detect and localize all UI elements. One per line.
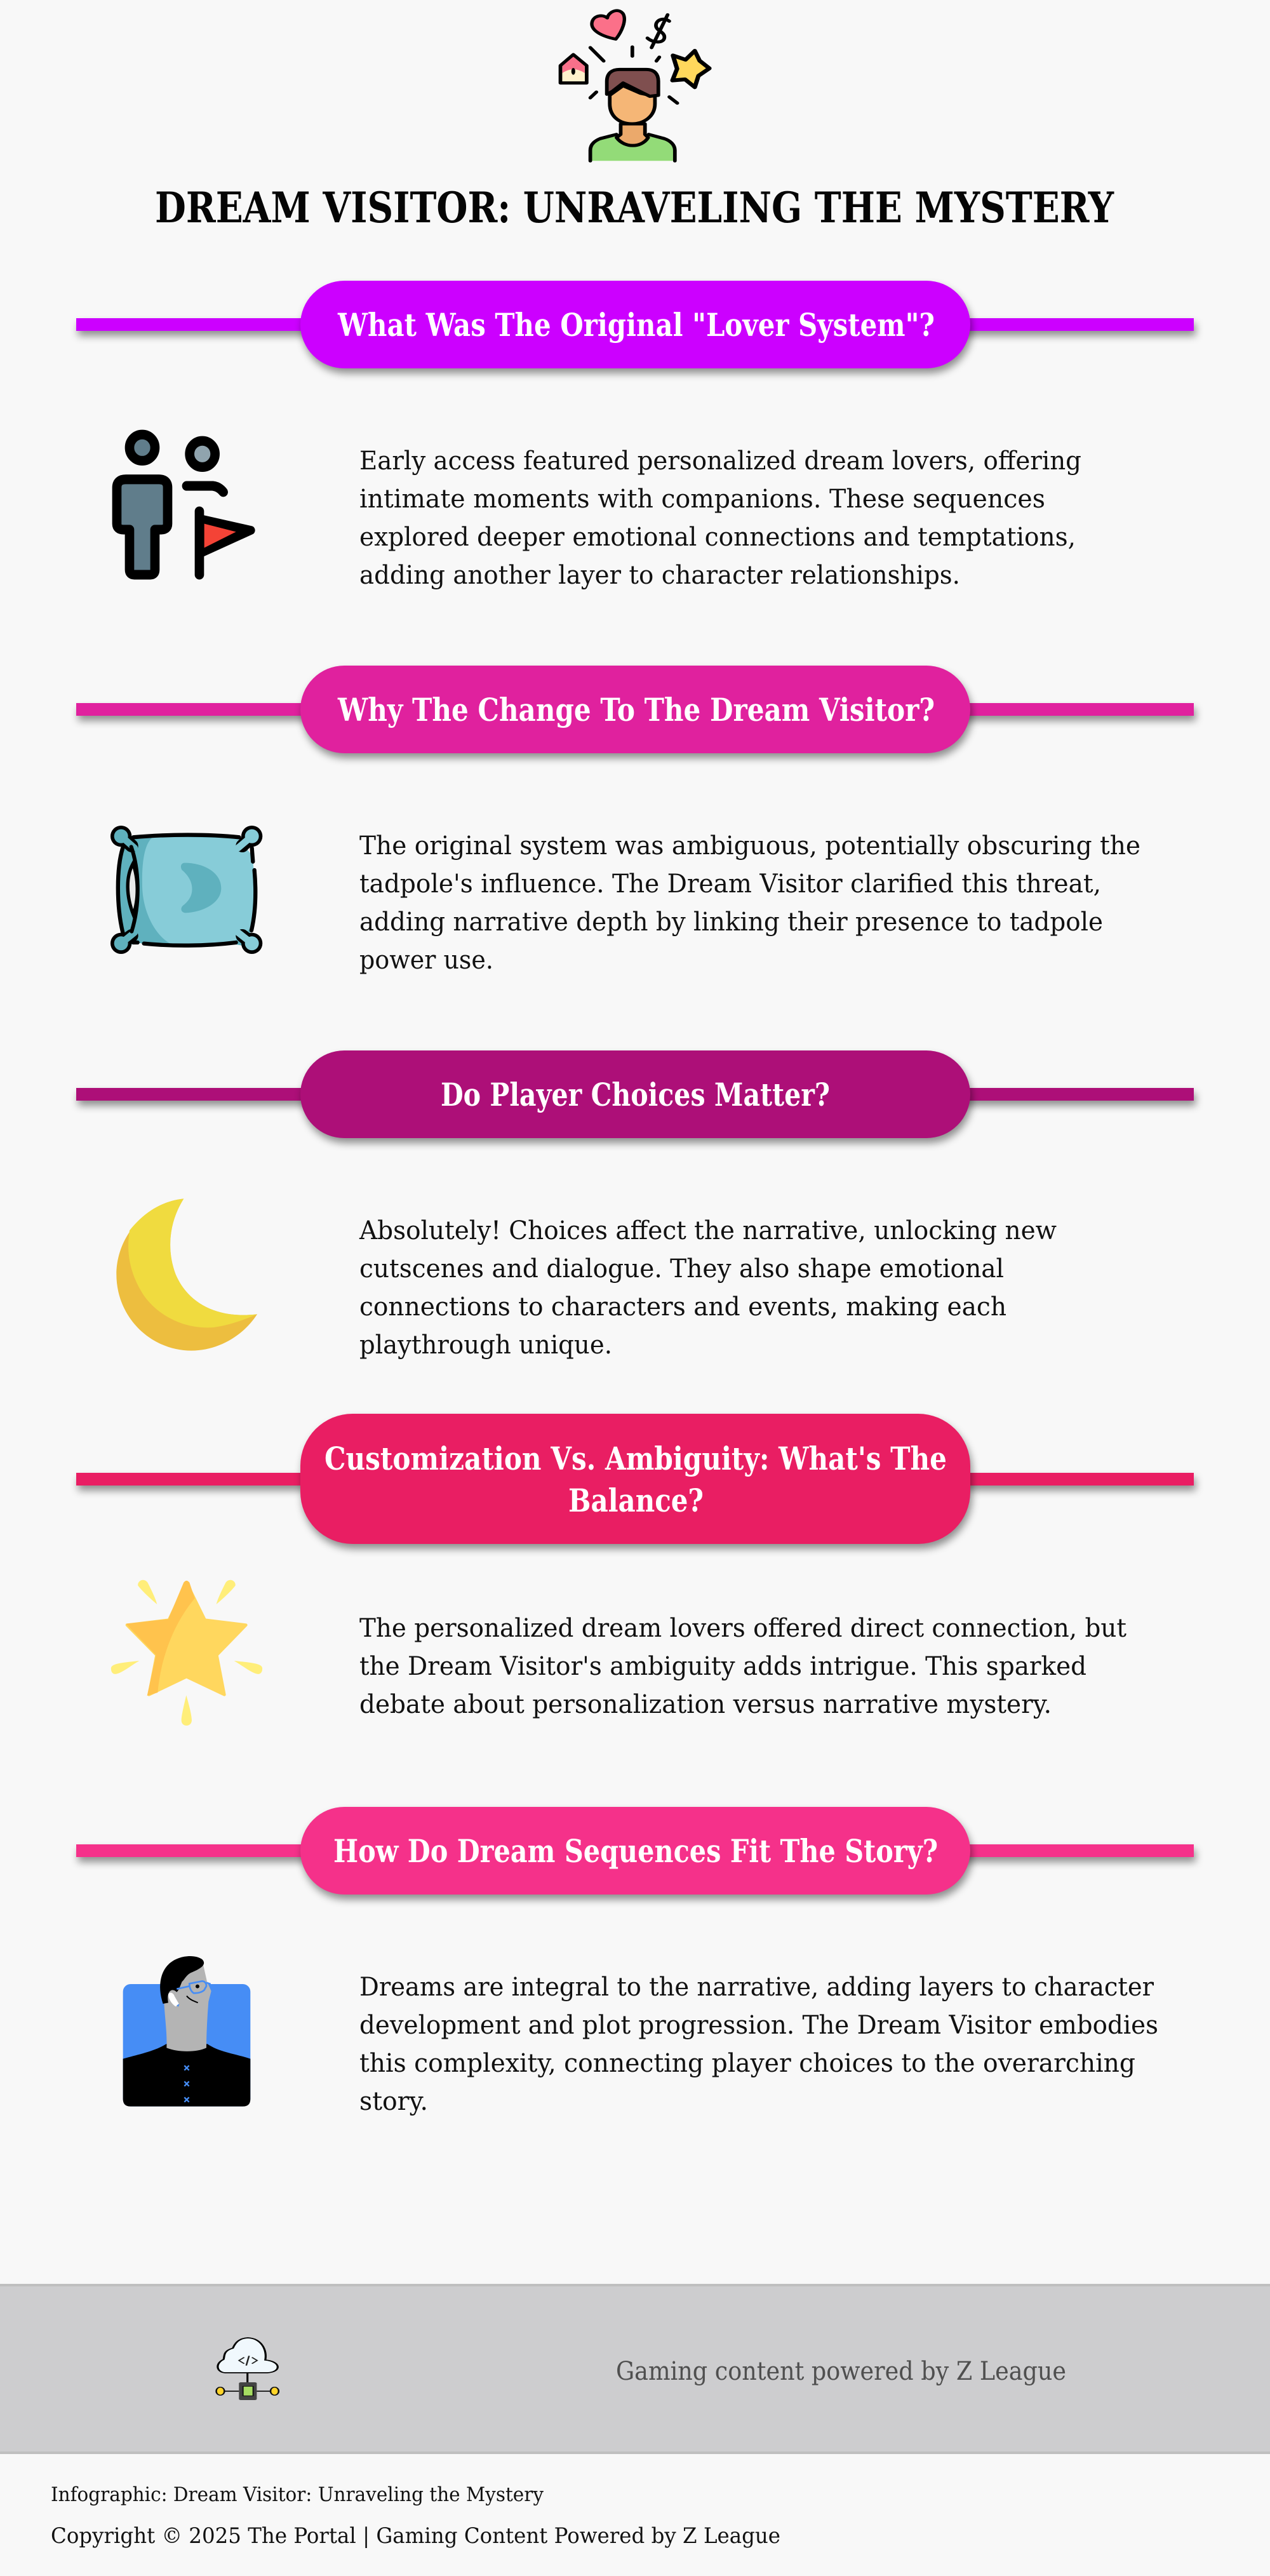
text block 3: cutscenes and dialogue. They also shape emotional: [359, 1254, 1004, 1284]
infographic caption: Infographic: Dream Visitor: Unraveling the Mystery: [51, 2483, 544, 2506]
panel: original lover system: [76, 281, 1194, 590]
section heading bar 1: What Was The Original "Lover System"?: [337, 306, 935, 344]
section heading bar 5: How Do Dream Sequences Fit The Story?: [333, 1832, 938, 1870]
text block 3: Absolutely! Choices affect the narrative, unlocking new: [359, 1216, 1057, 1245]
text block 4: The personalized dream lovers offered direct connection, but: [359, 1614, 1126, 1643]
text block 1: Early access featured personalized dream lovers, offering: [359, 446, 1081, 476]
panel: footer band: [0, 2284, 1270, 2454]
text block 5: Dreams are integral to the narrative, adding layers to character: [359, 1973, 1154, 2002]
section heading bar 3: [76, 1050, 1194, 1138]
icon: pillow: [110, 826, 262, 954]
text block 5: this complexity, connecting player choices to the overarching: [359, 2049, 1135, 2078]
text block 5: story.: [359, 2087, 428, 2116]
title: DREAM VISITOR: UNRAVELING THE MYSTERY: [155, 183, 1114, 232]
text block 4: [359, 1614, 1126, 1719]
text block 5: development and plot progression. The Dream Visitor embodies: [359, 2011, 1158, 2040]
section heading bar 1: [76, 281, 1194, 368]
footer tagline: Gaming content powered by Z League: [616, 2357, 1066, 2386]
icon: man with glasses portrait: [123, 1956, 250, 2107]
section heading bar 3: Do Player Choices Matter?: [441, 1076, 830, 1113]
text block 4: the Dream Visitor's ambiguity adds intrigue. This sparked: [359, 1652, 1086, 1681]
icon: shining star: [111, 1580, 262, 1726]
section heading bar 2: [76, 666, 1194, 753]
panel: why the change: [76, 666, 1194, 975]
text block 2: The original system was ambiguous, potentially obscuring the: [359, 831, 1140, 861]
icon: person with flag: [117, 434, 251, 575]
text block 1: adding another layer to character relationships.: [359, 561, 960, 590]
text block 2: tadpole's influence. The Dream Visitor clarified this threat,: [359, 869, 1101, 899]
text block 1: explored deeper emotional connections and temptations,: [359, 523, 1076, 552]
panel: dream sequences and story: [76, 1807, 1194, 2116]
panel: player choices: [76, 1050, 1194, 1360]
panel: customization vs ambiguity: [76, 1414, 1194, 1726]
section heading bar 4: [76, 1414, 1194, 1544]
text block 3: [359, 1216, 1057, 1360]
text block 2: adding narrative depth by linking their presence to tadpole: [359, 908, 1103, 937]
icon: crescent moon: [116, 1198, 257, 1351]
text block 5: [359, 1973, 1158, 2116]
icon: cloud code network: [217, 2338, 279, 2400]
icon: person dreaming of heart, money, house and star: [561, 11, 709, 161]
section heading bar 4: Customization Vs. Ambiguity: What's The: [324, 1440, 947, 1477]
text block 1: intimate moments with companions. These sequences: [359, 485, 1045, 514]
text block 1: [359, 446, 1081, 590]
copyright line: Copyright © 2025 The Portal | Gaming Content Powered by Z League: [51, 2523, 780, 2549]
text block 3: connections to characters and events, making each: [359, 1292, 1006, 1322]
section heading bar 2: Why The Change To The Dream Visitor?: [337, 691, 935, 728]
text block 4: debate about personalization versus narrative mystery.: [359, 1690, 1052, 1719]
section heading bar 4: Balance?: [568, 1482, 704, 1519]
text block 2: power use.: [359, 946, 493, 975]
section heading bar 5: [76, 1807, 1194, 1895]
text block 2: [359, 831, 1140, 975]
text block 3: playthrough unique.: [359, 1331, 612, 1360]
